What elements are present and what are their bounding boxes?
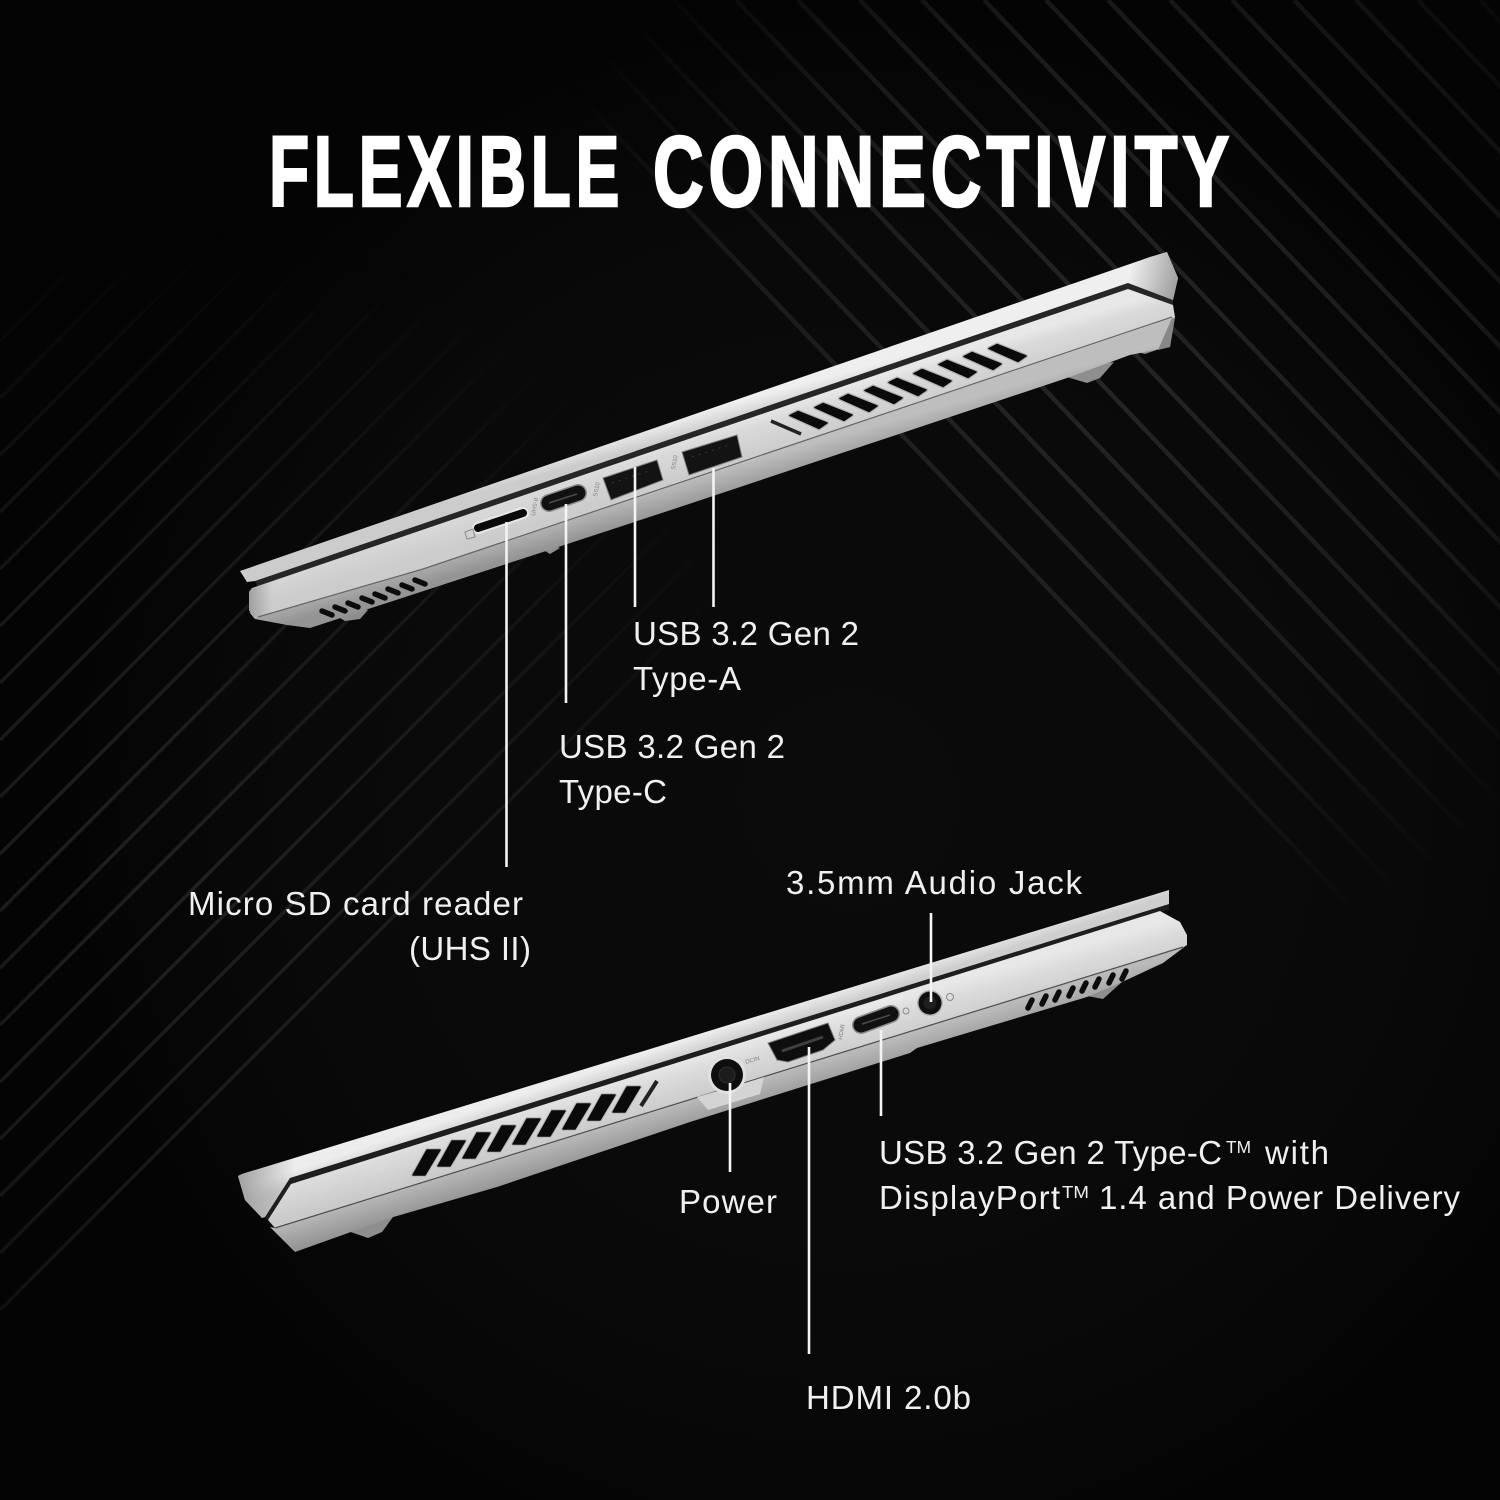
label: USB Type-C with DisplayPort and Power Delivery: TM [1226,1137,1251,1157]
port: power jack: DCIN [745,1056,761,1066]
label: Micro SD card reader [188,885,531,967]
label: 3.5mm Audio Jack: 3.5mm Audio Jack [786,864,1082,901]
main vent [771,344,1026,434]
port: HDMI [768,1023,847,1062]
laptop: right side view [238,890,1187,1252]
base lower section [249,316,1175,628]
lid hinge tip [1128,252,1178,300]
main vent [413,1081,657,1175]
base upper section [268,911,1187,1228]
label: USB Type-C with DisplayPort and Power Delivery: DisplayPort [879,1179,1060,1216]
laptop: left side view [240,252,1178,628]
lid [240,252,1178,582]
port: power jack [708,1056,761,1094]
label: USB 3.2 Gen 2 Type-C: USB 3.2 Gen 2 [559,728,785,765]
port: USB Type-C [549,481,602,503]
title [269,116,1234,228]
label: USB Type-C with DisplayPort and Power Delivery [879,1134,1460,1216]
label: USB 3.2 Gen 2 Type-C [559,728,785,810]
label: USB 3.2 Gen 2 Type-A: USB 3.2 Gen 2 [633,615,859,652]
port: audio jack [917,990,954,1016]
base lower section [270,945,1187,1252]
hinge gap [264,903,1169,1222]
port: micro SD slot: UHS-II [531,497,540,516]
label: HDMI 2.0b: HDMI 2.0b [806,1379,971,1416]
label: USB Type-C with DisplayPort and Power Delivery: 1.4 and Power Delivery [1099,1179,1460,1216]
rubber feet [330,340,1165,621]
small vent [322,580,425,615]
background pattern: falling diagonal lines [648,0,1500,833]
port: USB Type-A 2 [682,435,742,475]
label: Micro SD card reader: (UHS II) [409,930,531,967]
label: USB 3.2 Gen 2 Type-A: Type-A [633,660,741,697]
port: USB Type-C: SS10 [593,481,602,497]
seam line [275,947,1183,1228]
title: CONNECTIVITY [653,116,1234,228]
label: USB Type-C with DisplayPort and Power Delivery: USB 3.2 Gen 2 Type-C [879,1134,1222,1171]
power connector bump [697,1077,764,1110]
seam line [258,317,1172,617]
background pattern: rising diagonal lines [0,385,603,1311]
lid [238,890,1169,1218]
small vent [1028,971,1126,1008]
hinge gap [255,283,1173,588]
leader lines [506,467,931,1354]
port: micro SD slot [465,497,540,539]
port: HDMI: HDMI [838,1024,847,1040]
label: USB 3.2 Gen 2 Type-C: Type-C [559,773,667,810]
label: USB Type-C with DisplayPort and Power Delivery: TM [1062,1182,1089,1202]
rubber feet [345,982,1122,1238]
title: FLEXIBLE [269,116,624,228]
base right bevel [1158,318,1175,350]
port: USB Type-A 1 [603,454,680,500]
lid hinge tip [238,1158,295,1218]
port: USB Type-A 1: SS10 [671,454,680,470]
label: Micro SD card reader: Micro SD card reader [188,885,523,922]
base upper section [249,289,1175,618]
label: USB Type-C with DisplayPort and Power Delivery: with [1264,1134,1329,1171]
port: USB Type-C with DisplayPort [861,1008,909,1025]
label: USB 3.2 Gen 2 Type-A [633,615,859,697]
label: Power: Power [679,1183,777,1220]
